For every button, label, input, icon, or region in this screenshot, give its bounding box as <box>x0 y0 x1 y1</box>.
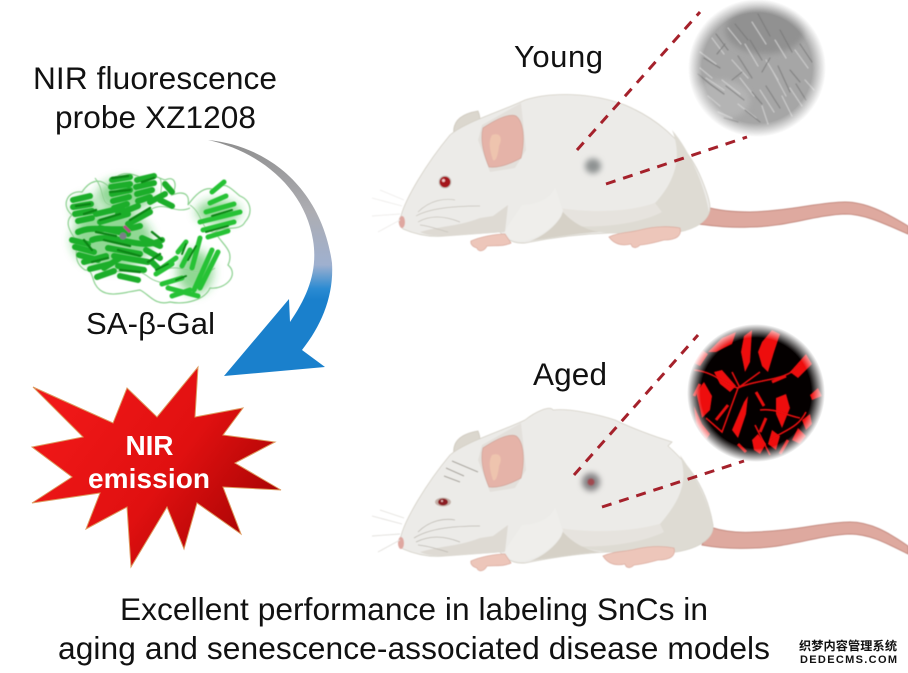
aged mouse hind foot <box>603 547 674 568</box>
micrograph: aged cells, red fluorescence <box>687 324 825 462</box>
title: NIR fluorescence probe XZ1208 <box>33 60 277 135</box>
aged mouse nose <box>398 537 404 549</box>
star label <box>88 430 210 494</box>
cell texture <box>698 14 814 124</box>
label: SA-β-Gal: SA-β-Gal <box>86 306 215 341</box>
mouse: aged <box>372 408 908 571</box>
aged mouse fluorescent spot <box>582 473 600 491</box>
young mouse front foot <box>471 234 511 251</box>
red fluorescent cells <box>692 330 822 454</box>
protein structure: SA-β-Gal ribbon <box>66 174 250 303</box>
protein underlay <box>72 179 240 294</box>
young mouse nose <box>399 216 405 228</box>
young mouse small ear <box>454 111 480 135</box>
dashed callout lines: young <box>577 12 747 184</box>
watermark: 织梦内容管理系统 <box>799 638 897 653</box>
aged mouse eye <box>435 498 451 506</box>
watermark: DEDECMS.COM <box>800 654 897 666</box>
aged mouse whiskers <box>414 519 480 552</box>
young mouse fluorescent spot <box>585 158 601 174</box>
aged mouse tail <box>702 522 908 554</box>
starburst: NIR emission <box>32 367 281 567</box>
protein beta sheets, right lobe <box>156 182 240 296</box>
young mouse eye <box>438 176 452 188</box>
micrograph: young cells, grey <box>688 0 826 137</box>
young mouse tail <box>698 202 908 234</box>
bottom caption: aging and senescence-associated disease models <box>58 630 770 666</box>
title: NIR fluorescence probe XZ1208: NIR fluorescence <box>33 60 277 96</box>
label: Aged: Aged <box>533 356 607 392</box>
dashed callout lines: aged <box>574 335 744 507</box>
young mouse whiskers <box>416 199 480 232</box>
bottom caption <box>58 591 770 666</box>
star label: NIR <box>126 430 174 461</box>
young mouse ear <box>482 115 523 167</box>
aged mouse small ear <box>454 431 480 455</box>
watermark <box>799 638 897 666</box>
aged mouse ear <box>482 435 523 487</box>
protein dark strands <box>76 176 162 272</box>
star label: emission <box>88 463 210 494</box>
aged mouse wrinkles <box>444 461 478 482</box>
label: Young: Young <box>514 39 603 74</box>
protein loops <box>66 174 250 303</box>
star shape <box>32 367 281 567</box>
young mouse hind foot <box>609 227 680 248</box>
aged mouse front foot <box>471 554 511 571</box>
protein ligand <box>120 226 130 240</box>
bottom caption: Excellent performance in labeling SnCs in <box>120 591 708 627</box>
mouse: young <box>372 95 908 251</box>
aged mouse body <box>399 408 713 563</box>
title: NIR fluorescence probe XZ1208: probe XZ1208 <box>55 99 256 135</box>
curved arrow from probe to NIR emission <box>208 140 332 376</box>
young mouse body <box>399 95 710 243</box>
protein helices, left lobe <box>72 176 172 280</box>
